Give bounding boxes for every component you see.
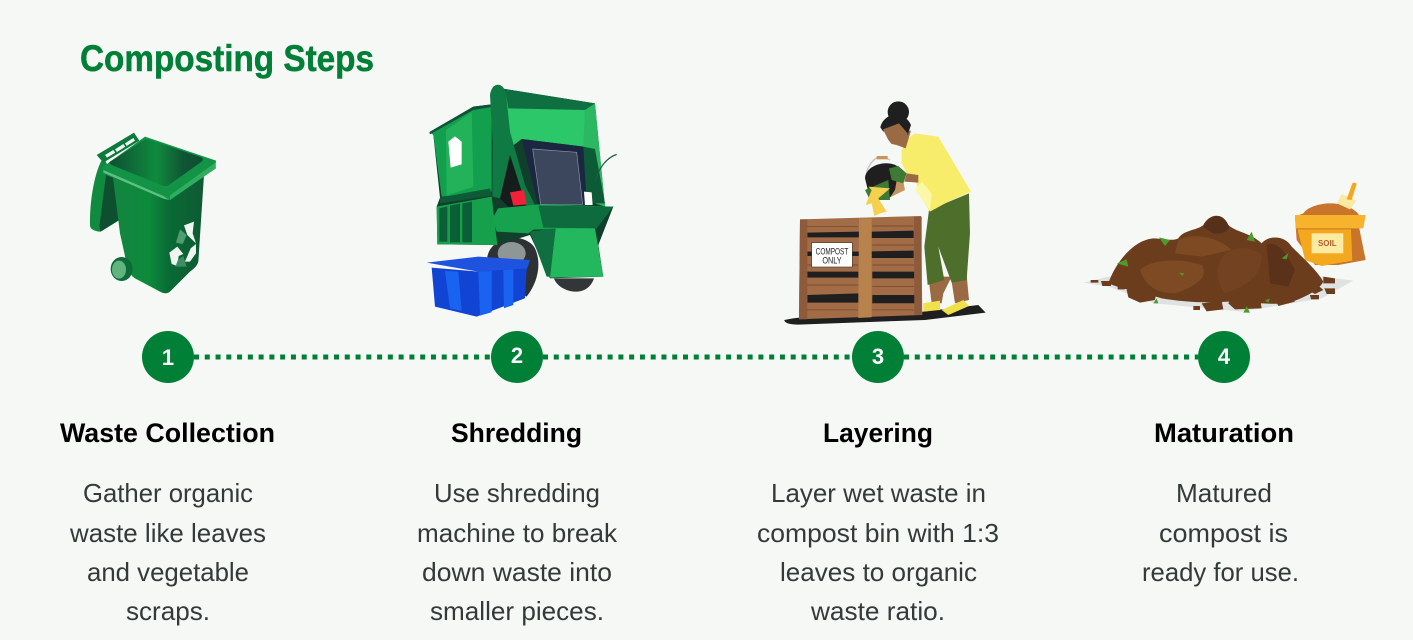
sign: compost only [812,243,852,267]
text block: layering: compost bin with 1:3 [757,518,999,548]
text block: waste collection: waste like leaves [69,518,266,548]
text block: shredding [417,478,618,626]
text block: layering: Layer wet waste in [771,478,986,508]
heading: maturation: Maturation [1154,418,1294,448]
timeline connector: dotted line [194,354,1198,360]
icon: green recycling bin [90,133,216,293]
step marker 3 [852,331,904,383]
text block: maturation: ready for use. [1142,557,1299,587]
icon: green shredding machine with blue crate [427,85,617,317]
text block: shredding: machine to break [417,518,618,548]
icon: compost pile and soil bag [1083,183,1366,313]
text block: layering [757,478,999,626]
heading: layering: Layering [823,418,933,448]
text block: maturation [1142,478,1299,587]
text block: layering: leaves to organic [780,557,977,587]
heading: shredding: Shredding [451,418,582,448]
step marker 2: 2 [511,343,523,368]
text block: waste collection: and vegetable [87,557,249,587]
machine silhouette underlay [430,87,613,278]
text block: maturation: compost is [1159,518,1288,548]
text block: waste collection [69,478,266,626]
step marker 4: 4 [1218,344,1231,369]
icon: compost pile and soil bag: SOIL [1318,239,1337,248]
title: Composting Steps [80,38,374,79]
step marker 3: 3 [872,344,884,369]
sign: compost only: COMPOST [816,247,849,257]
step marker 1: 1 [162,345,174,370]
step marker 2 [491,331,543,383]
text block: maturation: Matured [1176,478,1272,508]
heading: waste collection: Waste Collection [60,418,275,448]
text block: layering: waste ratio. [810,596,945,626]
text block: shredding: down waste into [422,557,612,587]
sign: compost only: ONLY [822,256,842,266]
icon: person pouring waste into compost crate [784,101,986,325]
text block: shredding: Use shredding [434,478,600,508]
text block: waste collection: Gather organic [83,478,253,508]
text block: waste collection: scraps. [126,596,210,626]
text block: shredding: smaller pieces. [430,596,604,626]
step marker 1 [142,331,194,383]
step marker 4 [1198,331,1250,383]
icon: recycling symbol [169,222,196,267]
